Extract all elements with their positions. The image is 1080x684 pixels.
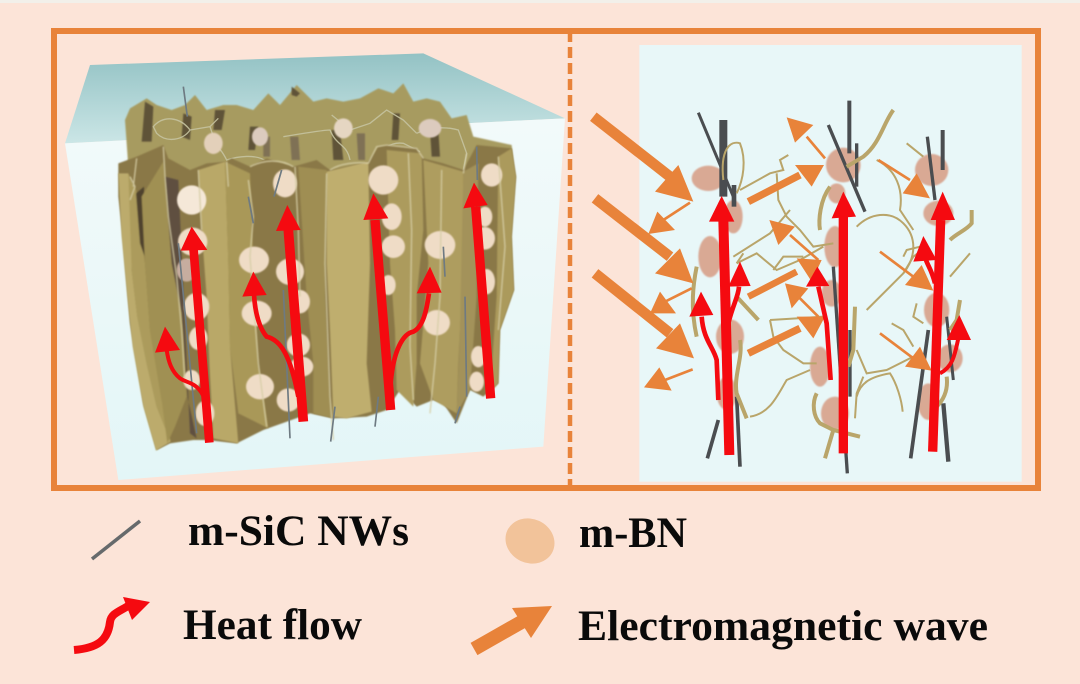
dashed divider [568,31,572,490]
legend label: Electromagnetic wave: Electromagnetic wave [578,603,988,650]
electromagnetic wave arrows [593,117,933,391]
heat arrow 4 [463,183,491,398]
incident wave arrow 1 [593,117,693,202]
thin tan fibers [723,143,970,418]
heat arrow 2 with branch [242,205,303,422]
sheet: centre [298,167,333,418]
scattered wave arrow right 2 [880,252,933,291]
heat arrow 1 with branch [155,227,209,443]
heat flow arrows in network [689,192,971,455]
legend icon: m-BN oval [498,510,562,572]
network heat arrow column 1 [689,196,751,455]
transmitted wave arrow 2 [748,258,822,297]
reflected wave arrow 2 [650,288,692,313]
reflected wave arrow 3 [644,367,693,391]
incident wave arrow 2 [595,198,693,283]
block top face [65,53,565,143]
SiC nanowires [698,101,953,473]
legend label: m-SiC NWs: m-SiC NWs [188,508,409,555]
transmitted wave arrow 3 [748,317,825,353]
scattered wave arrow right 3 [880,333,932,371]
legend label: m-BN: m-BN [579,510,687,557]
heat flow arrows in block [155,183,491,443]
panel: left aligned porous composite block [65,53,565,480]
rear sheet tops [125,83,515,197]
rear disks [204,118,441,154]
heat arrow 3 with branch [363,193,442,410]
m-SiC nanowires in block [178,87,477,442]
panel: right fiber network [593,45,1022,482]
disks between sheets [177,163,502,426]
sheet: left wide [142,162,187,443]
scattered wave arrow up 1 [787,117,825,158]
m-BN ovals [692,148,963,430]
scattered wave arrow right 1 [878,160,930,198]
reflected wave arrow 1 [648,203,690,234]
transmitted wave arrow 1 [748,165,824,202]
legend icon: m-SiC nanowire [92,521,140,559]
rear pale sheet rims [153,110,467,170]
scattered wave arrow up 3 [785,283,818,317]
incident wave arrow 3 [595,273,694,358]
block front face [65,118,565,480]
legend icon: electromagnetic wave [474,606,552,649]
network heat arrow column 3 [913,192,971,452]
sheet: far left [118,173,171,451]
sheet: right [387,150,423,407]
dark slot [136,187,145,257]
scattered wave arrow up 2 [769,220,818,260]
sheet edges [130,145,505,440]
orange frame [54,31,1038,488]
olive sheets [118,148,516,451]
network heat arrow column 2 [806,192,856,453]
legend [74,508,988,650]
sheet: centre-left [198,162,238,443]
legend label: Heat flow: Heat flow [183,602,362,649]
rear dark pockets [142,87,440,160]
thick tan fibers [693,110,972,458]
dark purple slot [165,177,197,438]
front sheet mass [118,145,516,450]
legend icon: heat flow [74,597,150,650]
network background [639,45,1022,482]
